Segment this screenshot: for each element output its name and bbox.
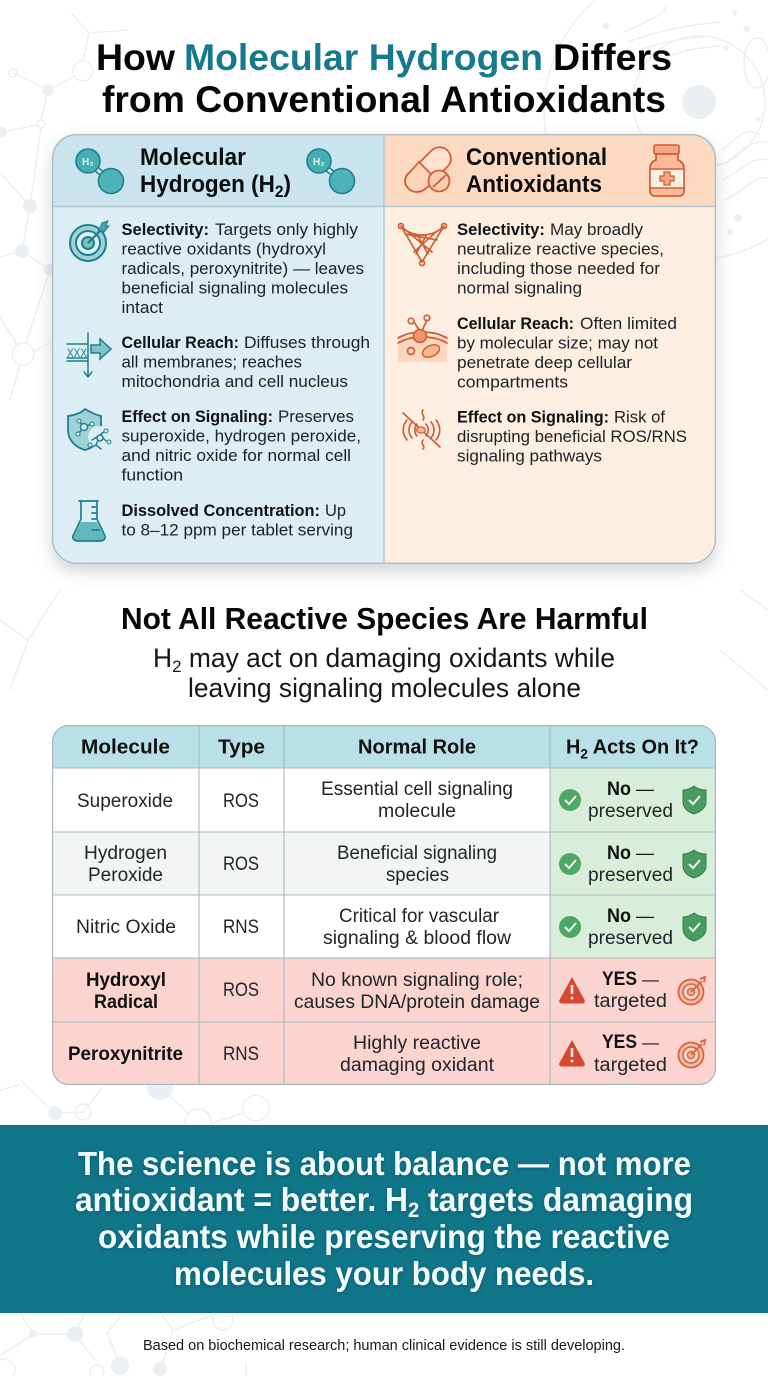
panel: conventional antioxidants (398, 144, 687, 466)
text: effect on signaling (457, 408, 687, 466)
row: nitric oxide: RNS (223, 917, 259, 938)
text: selectivity: reactive oxidants (hydroxyl (122, 240, 326, 258)
table header row: H (566, 736, 581, 758)
row: hydroxyl radical: causes DNA/protein damage (294, 992, 540, 1013)
takeaway banner (0, 1125, 768, 1313)
text: effect on signaling: signaling pathways (457, 446, 602, 466)
row: hydrogen peroxide (84, 843, 706, 886)
section subtitle: H (153, 643, 172, 673)
heading: molecular hydrogen: 2 (275, 182, 284, 201)
text: cellular reach: mitochondria and cell nucleus (122, 372, 348, 391)
row: hydrogen peroxide: No (607, 843, 631, 864)
heading: conventional antioxidants (466, 144, 607, 198)
row: hydroxyl radical (86, 969, 705, 1013)
row: hydroxyl radical: Hydroxyl (86, 970, 166, 991)
table header row: 2 (580, 746, 588, 762)
text: effect on signaling: Effect on Signaling: (457, 408, 609, 426)
row: superoxide: Superoxide (77, 791, 173, 812)
row: hydroxyl radical: targeted (594, 991, 667, 1012)
text: cellular reach: Cellular Reach: (122, 333, 239, 352)
title: Molecular Hydrogen (184, 37, 543, 78)
icon: limited cell reach (398, 315, 447, 362)
text: cellular reach: compartments (457, 372, 568, 392)
row: hydrogen peroxide: Peroxide (88, 865, 163, 886)
takeaway banner: molecules your body needs. (174, 1255, 594, 1292)
text: cellular reach: by molecular size; may not (457, 334, 658, 352)
icon: hydrogen molecule left (76, 149, 124, 194)
row: peroxynitrite: — (642, 1033, 659, 1052)
text: selectivity: Selectivity: (457, 220, 545, 239)
text: selectivity: neutralize reactive species, (457, 240, 664, 258)
icon: hydrogen molecule right (307, 149, 354, 194)
row: hydrogen peroxide: Beneficial signaling (337, 843, 497, 864)
takeaway banner: oxidants while preserving the reactive (98, 1218, 670, 1255)
row: superoxide (77, 779, 706, 822)
row: hydrogen peroxide: Hydrogen (84, 843, 167, 864)
takeaway banner: antioxidant = better. H (75, 1181, 421, 1218)
icon: hydrogen molecule left: H₂ (82, 157, 94, 168)
row: nitric oxide: Nitric Oxide (76, 917, 176, 938)
icon: pills (405, 147, 451, 192)
table header row: Molecule (81, 736, 170, 758)
comparison card (52, 134, 716, 564)
text: selectivity (122, 220, 364, 317)
takeaway banner: 2 (408, 1199, 419, 1222)
panel: molecular hydrogen (67, 144, 370, 541)
row: peroxynitrite: damaging oxidant (340, 1055, 495, 1076)
icon: disrupted signal (403, 410, 440, 449)
text: dissolved concentration: Up (325, 501, 346, 520)
text: effect on signaling: function (122, 466, 183, 484)
icon: membrane diffusion (67, 333, 111, 377)
heading: molecular hydrogen: ) (284, 171, 291, 198)
text: selectivity: intact (122, 298, 163, 317)
heading: molecular hydrogen (140, 144, 291, 201)
title: How (96, 37, 175, 78)
takeaway banner: The science is about balance — not more (78, 1145, 691, 1182)
text: effect on signaling: Preserves (278, 407, 354, 426)
table header row: Acts On It? (588, 736, 699, 758)
text: effect on signaling: and nitric oxide for normal cell (122, 446, 351, 465)
row: hydrogen peroxide: species (386, 865, 449, 886)
heading: molecular hydrogen: Hydrogen (H (140, 171, 287, 198)
takeaway banner: targets damaging (419, 1181, 693, 1218)
title (96, 37, 672, 120)
heading: conventional antioxidants: Antioxidants (466, 171, 602, 198)
text: selectivity (457, 220, 664, 298)
icon: flask (73, 501, 105, 541)
section subtitle (153, 643, 615, 703)
section subtitle: 2 (172, 657, 182, 676)
text: effect on signaling: superoxide, hydrogen peroxide, (122, 426, 361, 446)
comparison table (52, 725, 716, 1085)
text: selectivity: Selectivity: (122, 220, 209, 239)
row: peroxynitrite: Peroxynitrite (68, 1044, 183, 1065)
row: nitric oxide: preserved (588, 928, 673, 949)
row: hydrogen peroxide: preserved (588, 865, 673, 886)
icon: membrane diffusion: XXX (67, 346, 87, 360)
row: hydroxyl radical: No known signaling role; (311, 970, 523, 991)
row: peroxynitrite: targeted (594, 1055, 667, 1076)
text: selectivity: normal signaling (457, 278, 582, 298)
row: nitric oxide: signaling & blood flow (323, 928, 511, 949)
title: Differs (553, 37, 672, 78)
heading: conventional antioxidants: Conventional (466, 144, 607, 171)
row: superoxide: Essential cell signaling (321, 779, 513, 800)
icon: shield with molecule (68, 409, 111, 450)
footer note: Based on biochemical research; human clinical evidence is still developing. (143, 1338, 625, 1354)
text: cellular reach: Often limited (580, 314, 677, 333)
row: hydrogen peroxide: — (636, 843, 654, 863)
icon: medicine bottle (650, 145, 684, 196)
text: cellular reach: penetrate deep cellular (457, 353, 632, 372)
row: nitric oxide: — (636, 906, 654, 926)
row: nitric oxide: No (607, 906, 631, 927)
text: selectivity: radicals, peroxynitrite) — leaves (122, 259, 364, 278)
text: selectivity: beneficial signaling molecules (122, 278, 348, 298)
row: hydroxyl radical: — (642, 970, 659, 989)
row: peroxynitrite: YES (602, 1032, 637, 1053)
text: effect on signaling: Risk of (614, 408, 665, 426)
section subtitle: may act on damaging oxidants while (182, 643, 615, 673)
row: peroxynitrite: RNS (223, 1044, 259, 1065)
section subtitle: leaving signaling molecules alone (188, 673, 581, 703)
row: nitric oxide: Critical for vascular (339, 906, 500, 927)
row: superoxide: ROS (223, 791, 259, 812)
icon: hydrogen molecule right: H₂ (313, 157, 325, 168)
text: cellular reach: Diffuses through (244, 333, 370, 352)
row: hydroxyl radical: Radical (94, 992, 158, 1013)
text: dissolved concentration: Dissolved Concentration: (122, 501, 320, 520)
row: hydrogen peroxide: ROS (223, 854, 259, 875)
row: nitric oxide (76, 906, 706, 949)
heading: molecular hydrogen: Molecular (140, 144, 246, 171)
icon: net (398, 224, 446, 266)
text: selectivity: May broadly (550, 220, 644, 239)
text: cellular reach: all membranes; reaches (122, 352, 302, 372)
row: superoxide: preserved (588, 801, 673, 822)
text: selectivity: Targets only highly (215, 220, 359, 239)
row: hydroxyl radical: YES (602, 969, 637, 990)
text: effect on signaling (122, 407, 361, 484)
text: dissolved concentration: to 8–12 ppm per tablet serving (122, 520, 353, 540)
text: selectivity: including those needed for (457, 259, 660, 278)
text: cellular reach: Cellular Reach: (457, 314, 574, 333)
section heading: Not All Reactive Species Are Harmful (121, 602, 648, 636)
row: hydroxyl radical: ROS (223, 980, 259, 1001)
text: cellular reach (122, 333, 370, 391)
text: cellular reach (457, 314, 677, 392)
row: peroxynitrite (68, 1032, 705, 1076)
table header row (81, 736, 699, 762)
title: from Conventional Antioxidants (102, 79, 666, 120)
text: effect on signaling: Effect on Signaling: (122, 407, 273, 426)
row: peroxynitrite: Highly reactive (353, 1033, 481, 1054)
icon: target (70, 221, 109, 261)
table header row: Normal Role (358, 736, 476, 758)
table header row: Type (218, 736, 265, 758)
row: superoxide: molecule (378, 801, 456, 822)
row: superoxide: No (607, 779, 631, 800)
text: dissolved concentration (122, 501, 353, 540)
row: superoxide: — (636, 779, 654, 799)
text: effect on signaling: disrupting beneficial ROS/RNS (457, 427, 687, 446)
